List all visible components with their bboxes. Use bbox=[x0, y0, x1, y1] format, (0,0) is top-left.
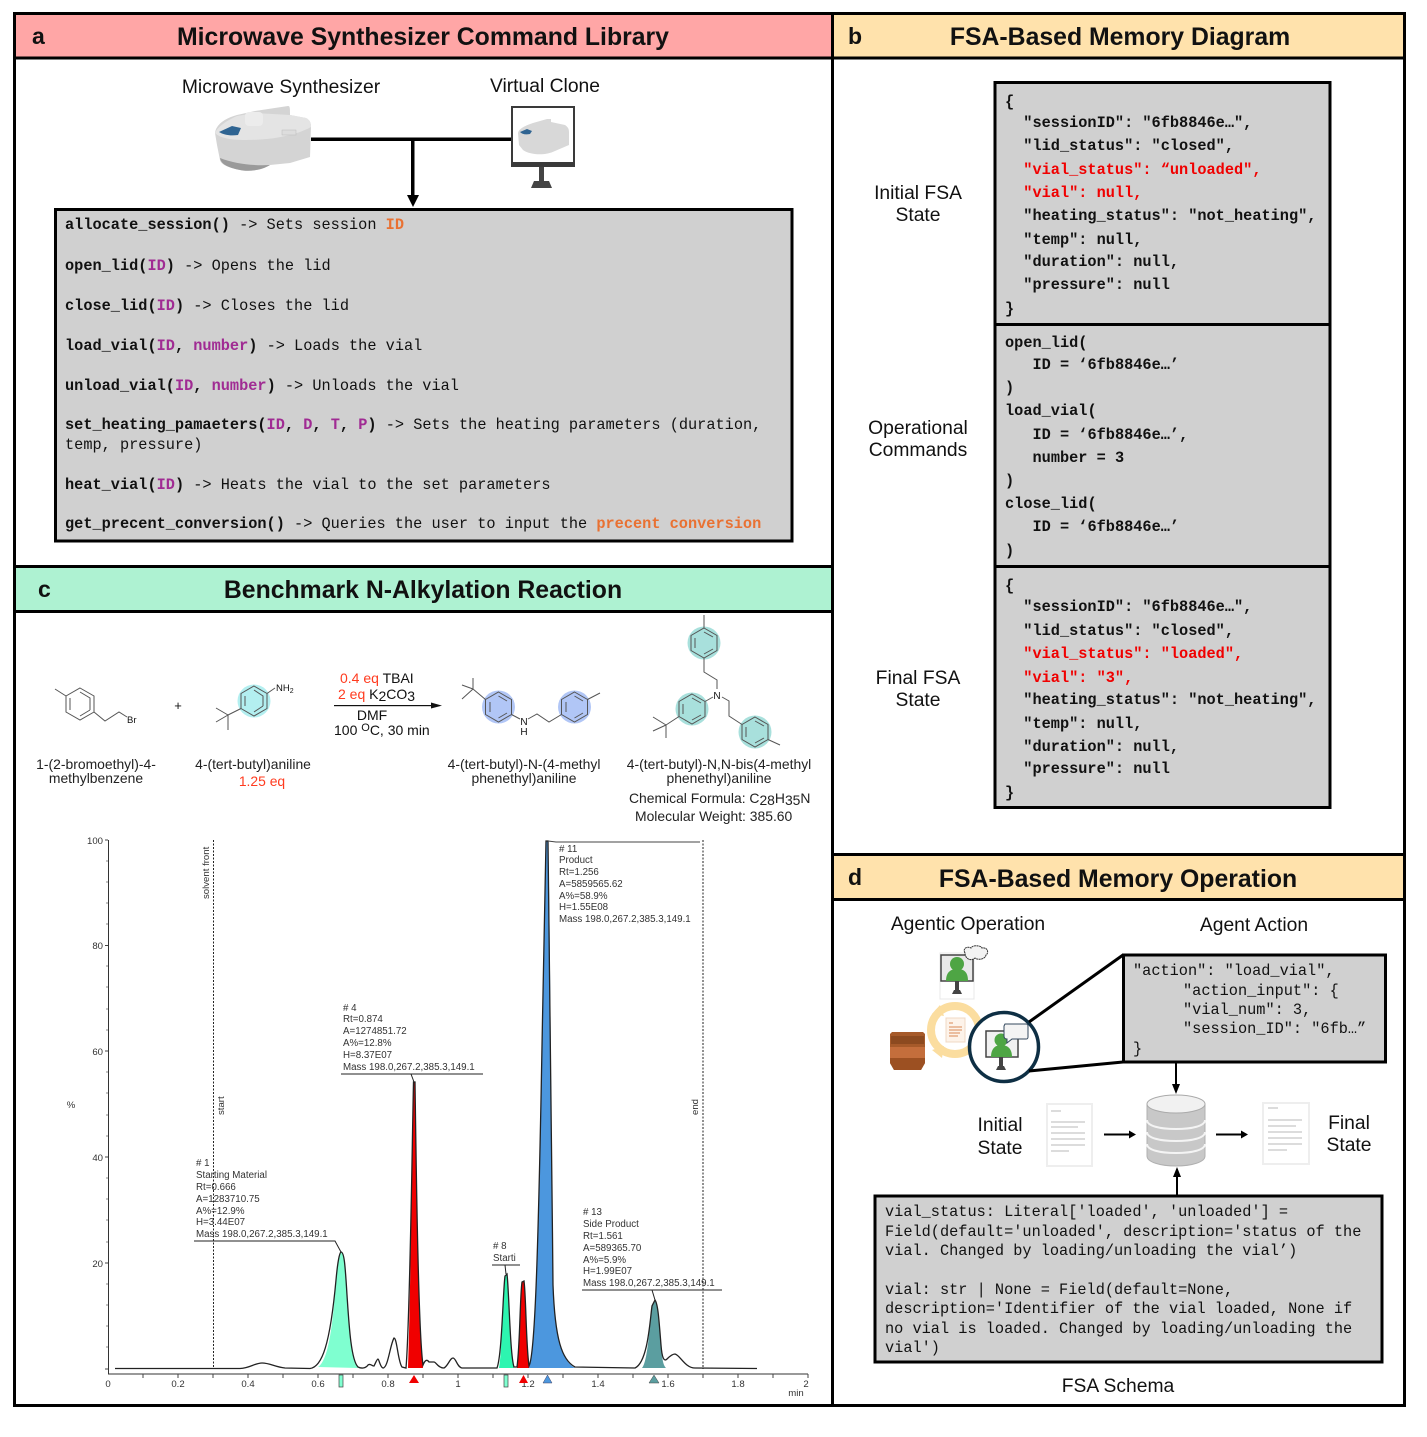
label: final state: State bbox=[1326, 1135, 1372, 1156]
code box: final state: "pressure": null bbox=[1023, 760, 1170, 778]
peak annotation: peak 4: Mass 198.0,267.2,385.3,149.1 bbox=[343, 1062, 475, 1073]
name and properties: bis-alkylated product: 35 bbox=[785, 792, 801, 808]
reaction conditions and arrow: C, 30 min bbox=[370, 722, 430, 738]
code box: initial state: "temp": null, bbox=[1023, 231, 1142, 249]
icon: final state document bbox=[1263, 1103, 1309, 1164]
icon: initial state document bbox=[1047, 1104, 1092, 1166]
reactant names: 1-(2-bromoethyl)-4- bbox=[36, 756, 156, 772]
code box: initial state: { bbox=[1005, 93, 1014, 111]
icon: thinking agent monitor bbox=[940, 946, 988, 999]
reactant names bbox=[36, 756, 311, 789]
chart axes and tick labels: % bbox=[67, 1100, 76, 1111]
chart axes and tick labels: 1.2 bbox=[521, 1379, 535, 1390]
label: initial state: State bbox=[977, 1138, 1023, 1159]
name and properties: bis-alkylated product bbox=[627, 756, 811, 824]
label: initial FSA state: Initial FSA bbox=[874, 183, 962, 204]
peak annotation: starting material 1 bbox=[194, 1158, 341, 1252]
peak annotation: side product: Rt=1.561 bbox=[583, 1231, 623, 1242]
peak annotation: starting material 8: # 8 bbox=[493, 1241, 507, 1252]
panel b header: FSA-Based Memory Diagram bbox=[950, 24, 1290, 51]
peak annotation: peak 4: Rt=0.874 bbox=[343, 1014, 383, 1025]
chart axes and tick labels: 1.6 bbox=[661, 1379, 675, 1390]
arrow: database to final state bbox=[1216, 1130, 1248, 1138]
code box: final state: "duration": null, bbox=[1023, 738, 1179, 756]
code box: operational commands bbox=[995, 324, 1330, 566]
label: agentic operation: Agentic Operation bbox=[891, 914, 1045, 935]
chart axes and tick labels: 40 bbox=[92, 1153, 103, 1164]
reactant names: 1.25 eq bbox=[239, 773, 285, 789]
peak annotation: peak 4: A%=12.8% bbox=[343, 1038, 392, 1049]
panel b: memory diagram bbox=[832, 14, 1404, 808]
code box: initial state: "heating_status": "not_heating", bbox=[1023, 207, 1316, 225]
reaction conditions and arrow: CO bbox=[386, 686, 407, 702]
peak annotation: starting material 1: Starting Material bbox=[196, 1170, 267, 1181]
reaction conditions and arrow: 2 eq K bbox=[338, 686, 378, 702]
code box: initial state bbox=[995, 82, 1330, 324]
name and properties: bis-alkylated product: 4-(tert-butyl)-N,N-bis(4-methyl bbox=[627, 756, 811, 772]
dashed boundary markers: start bbox=[216, 1096, 227, 1115]
reactant names: 4-(tert-butyl)aniline bbox=[195, 756, 311, 772]
FSA schema code box bbox=[875, 1196, 1382, 1362]
agent action code box: "session_ID": "6fb…” bbox=[1183, 1020, 1366, 1038]
plus sign: + bbox=[174, 698, 182, 713]
arrow: down to command list bbox=[407, 139, 419, 207]
label: final state: Final bbox=[1328, 1113, 1370, 1134]
icon: database bbox=[1147, 1095, 1205, 1166]
code box: operational commands: ) bbox=[1005, 379, 1014, 397]
icon: virtual clone monitor bbox=[511, 106, 575, 188]
peak annotation: product: Mass 198.0,267.2,385.3,149.1 bbox=[559, 914, 691, 925]
peak annotation: starting material 1: A=1283710.75 bbox=[196, 1194, 260, 1205]
command list box: allocate_session() -> Sets session ID bbox=[65, 216, 404, 234]
peak annotation: side product: A%=5.9% bbox=[583, 1255, 626, 1266]
panel c: benchmark reaction bbox=[15, 567, 832, 1399]
panel d: memory operation bbox=[832, 855, 1404, 1397]
molecule: mono-alkylated product bbox=[462, 678, 600, 738]
FSA schema code box: vial') bbox=[885, 1339, 940, 1357]
peak annotation: product: A%=58.9% bbox=[559, 891, 608, 902]
peak annotation: product: # 11 bbox=[559, 844, 577, 855]
code box: final state: "vial_status": "loaded", bbox=[1023, 645, 1243, 663]
label: FSA schema: FSA Schema bbox=[1062, 1376, 1175, 1397]
chart axes and tick labels: 0.8 bbox=[381, 1379, 395, 1390]
peak annotation: peak 4 bbox=[341, 1003, 483, 1082]
command list box: open_lid(ID) -> Opens the lid bbox=[65, 257, 331, 275]
code box: operational commands: close_lid( bbox=[1005, 495, 1097, 513]
peak annotation: peak 4: # 4 bbox=[343, 1003, 357, 1014]
panel c header: c bbox=[38, 576, 51, 602]
code box: final state: "lid_status": "closed", bbox=[1023, 622, 1234, 640]
code box: initial state: "pressure": null bbox=[1023, 276, 1170, 294]
panel c header: Benchmark N-Alkylation Reaction bbox=[224, 577, 622, 604]
name and properties: bis-alkylated product: 28 bbox=[759, 792, 775, 808]
FSA schema code box: vial_status: Literal['loaded', 'unloaded'] = bbox=[885, 1203, 1288, 1221]
chart axes and tick labels: 0.2 bbox=[171, 1379, 185, 1390]
peak annotation: side product: H=1.99E07 bbox=[583, 1266, 632, 1277]
molecule: mono-alkylated product: N bbox=[520, 717, 528, 728]
FSA schema code box: description='Identifier of the vial loaded, None if bbox=[885, 1300, 1352, 1318]
molecule: bromoethyl methylbenzene: Br bbox=[127, 715, 136, 726]
chart axes and tick labels: 20 bbox=[92, 1259, 103, 1270]
code box: operational commands: ) bbox=[1005, 542, 1014, 560]
peak annotation: starting material 8: Starti bbox=[493, 1253, 516, 1264]
code box: final state: "temp": null, bbox=[1023, 715, 1142, 733]
code box: operational commands: ID = ‘6fb8846e…’, bbox=[1032, 426, 1188, 444]
code box: final state: } bbox=[1005, 784, 1014, 802]
code box: final state bbox=[995, 566, 1330, 808]
dashed boundary markers bbox=[201, 840, 703, 1369]
name and properties: bis-alkylated product: N bbox=[800, 790, 810, 806]
label: virtual clone: Virtual Clone bbox=[490, 76, 600, 97]
code box: operational commands: ) bbox=[1005, 472, 1014, 490]
peak annotation: starting material 1: # 1 bbox=[196, 1158, 210, 1169]
label: operational commands: Commands bbox=[869, 440, 967, 461]
peak annotation: starting material 8 bbox=[492, 1241, 520, 1274]
chart axes and tick labels: 0.6 bbox=[311, 1379, 325, 1390]
agent action code box: "vial_num": 3, bbox=[1183, 1001, 1311, 1019]
molecule: bis-alkylated product: N bbox=[713, 691, 721, 702]
command list box: heat_vial(ID) -> Heats the vial to the set parameters bbox=[65, 476, 551, 494]
dashed boundary markers: solvent front bbox=[201, 846, 212, 899]
chart axes and tick labels bbox=[67, 836, 809, 1399]
code box: initial state: "vial": null, bbox=[1023, 184, 1142, 202]
peak annotation: starting material 1: Mass 198.0,267.2,385.3,149.1 bbox=[196, 1229, 328, 1240]
code box: initial state: } bbox=[1005, 300, 1014, 318]
chromatogram trace bbox=[115, 841, 757, 1368]
label: initial state: Initial bbox=[977, 1115, 1023, 1136]
name and properties: bis-alkylated product: phenethyl)aniline bbox=[666, 770, 772, 786]
code box: final state: "sessionID": "6fb8846e…", bbox=[1023, 598, 1252, 616]
peak annotation: product: Product bbox=[559, 855, 593, 866]
code box: initial state: "duration": null, bbox=[1023, 253, 1179, 271]
command list box: close_lid(ID) -> Closes the lid bbox=[65, 297, 349, 315]
panel a header bbox=[15, 14, 832, 58]
reactant names: methylbenzene bbox=[49, 770, 143, 786]
label: operational commands: Operational bbox=[868, 418, 968, 439]
chromatogram chart bbox=[67, 836, 809, 1399]
panel c header bbox=[15, 567, 832, 611]
icon: microwave synthesizer bbox=[215, 106, 311, 171]
FSA schema code box: Field(default='unloaded', description='status of the bbox=[885, 1223, 1361, 1241]
peak annotation: peak 4: H=8.37E07 bbox=[343, 1050, 392, 1061]
chart axes and tick labels: 1.8 bbox=[731, 1379, 745, 1390]
agent action code box bbox=[1124, 955, 1386, 1062]
panel d header bbox=[832, 855, 1404, 899]
agent action code box: } bbox=[1133, 1040, 1142, 1058]
command list box: temp, pressure) bbox=[65, 436, 202, 454]
FSA schema code box: no vial is loaded. Changed by loading/unloading the bbox=[885, 1320, 1352, 1338]
peak annotation: product: Rt=1.256 bbox=[559, 867, 599, 878]
arrow: initial state to database bbox=[1104, 1130, 1136, 1138]
label: initial FSA state: State bbox=[895, 205, 941, 226]
peak annotation: peak 4: A=1274851.72 bbox=[343, 1026, 407, 1037]
peak annotation: product bbox=[548, 841, 700, 925]
chart axes and tick labels: 100 bbox=[87, 836, 103, 847]
magnified acting agent bbox=[970, 1012, 1038, 1082]
molecule: mono-alkylated product: H bbox=[520, 727, 528, 738]
command list box: get_precent_conversion() -> Queries the user to input the precent conversion bbox=[65, 515, 761, 533]
code box: initial state: "vial_status": “unloaded", bbox=[1023, 161, 1261, 179]
dashed boundary markers: end bbox=[690, 1099, 701, 1115]
code box: operational commands: ID = ‘6fb8846e…’ bbox=[1032, 518, 1179, 536]
molecule: bis-alkylated product bbox=[653, 615, 780, 748]
molecule: bromoethyl methylbenzene bbox=[55, 688, 136, 726]
chart axes and tick labels: 0.4 bbox=[241, 1379, 255, 1390]
reaction conditions and arrow: 100 bbox=[334, 722, 357, 738]
arrow: schema to database bbox=[1173, 1167, 1181, 1196]
label: final FSA state: State bbox=[895, 690, 941, 711]
peak annotation: product: H=1.55E08 bbox=[559, 902, 608, 913]
icon: cycle with document bbox=[931, 1005, 979, 1058]
chart axes and tick labels: min bbox=[788, 1388, 804, 1399]
panel d header: FSA-Based Memory Operation bbox=[939, 866, 1297, 893]
icon: toolbox chest bbox=[890, 1032, 925, 1070]
chart axes and tick labels: 0 bbox=[105, 1379, 111, 1390]
chart axes and tick labels: 2 bbox=[803, 1379, 809, 1390]
connector line between synthesizer and clone bbox=[311, 138, 511, 141]
FSA schema code box: vial. Changed by loading/unloading the vial’) bbox=[885, 1242, 1297, 1260]
name: mono-alkylated product: 4-(tert-butyl)-N-(4-methyl bbox=[448, 756, 600, 772]
agent action code box: "action": "load_vial", bbox=[1133, 962, 1335, 980]
chart axes and tick labels: 80 bbox=[92, 941, 103, 952]
name: mono-alkylated product bbox=[448, 756, 600, 786]
molecule: tert-butyl aniline: 2 bbox=[290, 688, 294, 695]
arrow: action to database bbox=[1172, 1062, 1180, 1094]
chart axes and tick labels: 1.4 bbox=[591, 1379, 605, 1390]
peak annotation: side product: Mass 198.0,267.2,385.3,149.1 bbox=[583, 1278, 715, 1289]
peak markers on the axis bbox=[339, 1375, 659, 1387]
zoom lines to action box bbox=[1029, 955, 1123, 1071]
chart axes and tick labels: 1 bbox=[455, 1379, 461, 1390]
label: microwave synthesizer: Microwave Synthesizer bbox=[182, 77, 381, 98]
command list box: load_vial(ID, number) -> Loads the vial bbox=[65, 337, 422, 355]
name: mono-alkylated product: phenethyl)aniline bbox=[471, 770, 577, 786]
code box: final state: { bbox=[1005, 577, 1014, 595]
panel b header bbox=[832, 14, 1404, 58]
molecule: tert-butyl aniline bbox=[216, 683, 294, 730]
panel a header: Microwave Synthesizer Command Library bbox=[177, 24, 669, 51]
name and properties: bis-alkylated product: Chemical Formula: C bbox=[629, 790, 759, 806]
label: agent action: Agent Action bbox=[1200, 915, 1308, 936]
panel a header: a bbox=[32, 23, 45, 49]
panel d header: d bbox=[848, 864, 862, 890]
code box: operational commands: ID = ‘6fb8846e…’ bbox=[1032, 356, 1179, 374]
agent action code box: "action_input": { bbox=[1183, 982, 1339, 1000]
code box: operational commands: number = 3 bbox=[1032, 449, 1124, 467]
peak annotation: side product: # 13 bbox=[583, 1207, 602, 1218]
command list box bbox=[56, 210, 792, 541]
peak annotation: starting material 1: H=3.44E07 bbox=[196, 1217, 245, 1228]
peak annotation: starting material 1: A%=12.9% bbox=[196, 1206, 245, 1217]
code box: operational commands: open_lid( bbox=[1005, 334, 1087, 352]
name and properties: bis-alkylated product: H bbox=[775, 790, 785, 806]
code box: initial state: "sessionID": "6fb8846e…", bbox=[1023, 114, 1252, 132]
reaction conditions and arrow: DMF bbox=[357, 707, 387, 723]
code box: final state: "vial": "3", bbox=[1023, 669, 1133, 687]
molecule: tert-butyl aniline: NH bbox=[276, 683, 290, 694]
reaction conditions and arrow: 2 bbox=[378, 688, 386, 704]
peak annotation: starting material 1: Rt=0.666 bbox=[196, 1182, 236, 1193]
FSA schema code box: vial: str | None = Field(default=None, bbox=[885, 1281, 1233, 1299]
reaction conditions and arrow: 0.4 eq TBAI bbox=[340, 670, 414, 686]
peak annotation: product: A=5859565.62 bbox=[559, 879, 623, 890]
code box: final state: "heating_status": "not_heating", bbox=[1023, 691, 1316, 709]
peak annotation: side product: Side Product bbox=[583, 1219, 639, 1230]
code box: operational commands: load_vial( bbox=[1005, 402, 1097, 420]
command list box: set_heating_pamaeters(ID, D, T, P) -> Sets the heating parameters (duration, bbox=[65, 416, 761, 434]
peak annotation: side product bbox=[582, 1207, 722, 1300]
panel a: command library bbox=[15, 14, 832, 541]
name and properties: bis-alkylated product: Molecular Weight: 385.60 bbox=[635, 808, 793, 824]
peak fills bbox=[318, 841, 666, 1368]
reaction conditions and arrow: O bbox=[361, 722, 370, 734]
command list box: unload_vial(ID, number) -> Unloads the vial bbox=[65, 377, 459, 395]
peak annotation: side product: A=589365.70 bbox=[583, 1243, 642, 1254]
reaction conditions and arrow: 3 bbox=[407, 688, 415, 704]
chart axes and tick labels: 60 bbox=[92, 1047, 103, 1058]
label: final FSA state: Final FSA bbox=[876, 668, 960, 689]
reaction conditions and arrow bbox=[334, 670, 442, 738]
panel b header: b bbox=[848, 23, 862, 49]
code box: initial state: "lid_status": "closed", bbox=[1023, 137, 1234, 155]
